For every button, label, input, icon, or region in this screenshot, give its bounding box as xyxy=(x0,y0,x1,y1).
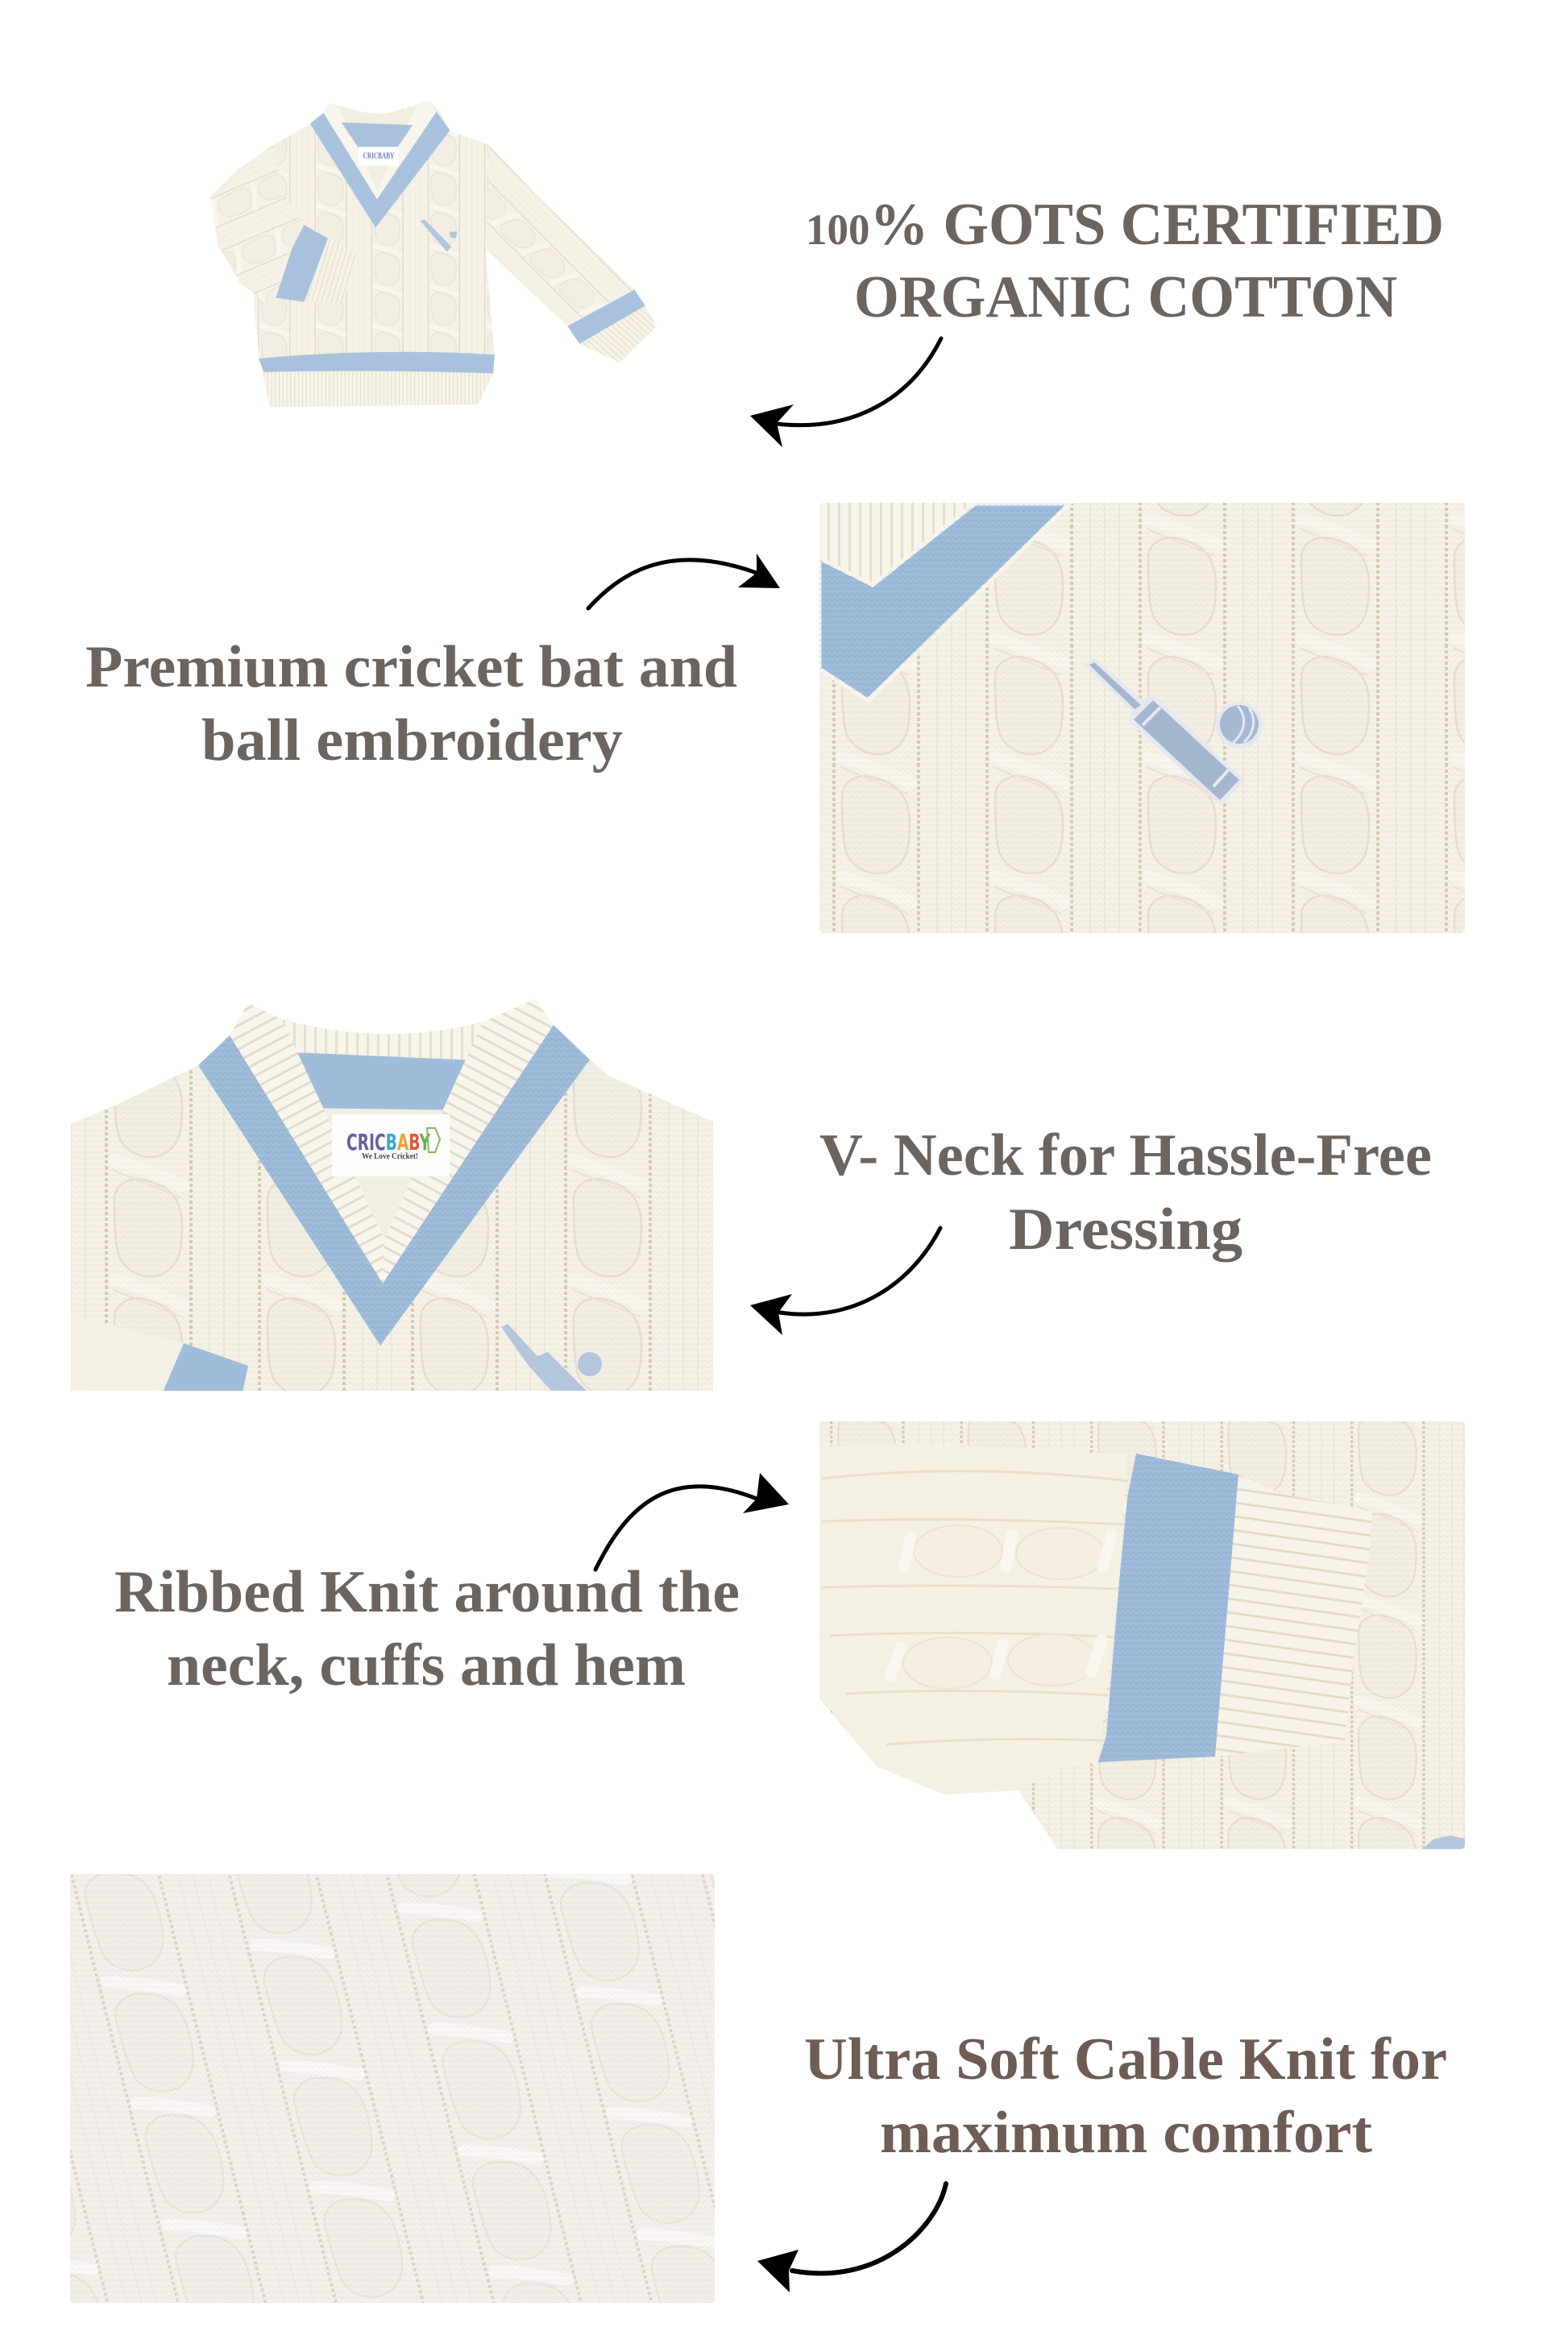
icon: embroidered cricket bat xyxy=(1085,657,1244,806)
blue back-neck tape xyxy=(297,1052,466,1110)
arrow: V-neck xyxy=(750,1228,940,1335)
heading: organic cotton xyxy=(806,192,1444,330)
inner neck xyxy=(324,1054,442,1225)
text: embroidery feature: ball embroidery xyxy=(201,707,623,774)
text: ribbed knit feature: Ribbed Knit around the xyxy=(114,1559,740,1625)
sweater left cuff xyxy=(276,225,359,305)
text: embroidery feature xyxy=(85,634,737,774)
ribbed cuff xyxy=(1215,1475,1372,1757)
icon: green footprint xyxy=(427,1128,440,1152)
back neck ribbing xyxy=(283,1020,482,1060)
cable crossing bars xyxy=(890,1535,1112,1676)
panel: ribbed cuff close-up xyxy=(814,1421,1465,1853)
brand label xyxy=(332,1114,450,1176)
sweater collar xyxy=(310,101,450,228)
sweater neck label: CRICBABY xyxy=(363,152,395,160)
text: V-neck feature: V- Neck for Hassle-Free xyxy=(819,1122,1432,1188)
sleeve cable twists xyxy=(903,1525,1105,1689)
text: ribbed knit feature xyxy=(114,1559,740,1699)
panel: cable knit fabric close-up xyxy=(70,1874,715,2303)
blue collar band xyxy=(819,504,1069,700)
blue cuff band xyxy=(1098,1454,1238,1762)
corner embroidery remnant xyxy=(1422,1836,1465,1849)
collar ribbing corner xyxy=(819,503,972,582)
sweater right sleeve xyxy=(479,145,645,344)
heading: organic cotton: 100% GOTS CERTIFIED xyxy=(806,192,1444,258)
panel: V-neck close-up xyxy=(70,999,715,1392)
sleeve xyxy=(817,1443,1128,1794)
white background below sleeve xyxy=(814,1692,1060,1853)
arrow: ribbed knit xyxy=(595,1473,789,1570)
brand label: We Love Cricket! xyxy=(362,1152,418,1161)
text: ribbed knit feature: neck, cuffs and hem xyxy=(167,1632,686,1699)
icon: cricket ball xyxy=(578,1352,602,1376)
sweater hem xyxy=(259,352,495,407)
arrow: embroidery xyxy=(588,554,780,608)
panel: embroidery close-up xyxy=(819,503,1465,933)
text: cable knit feature: maximum comfort xyxy=(880,2100,1372,2166)
text: embroidery feature: Premium cricket bat and xyxy=(85,634,737,700)
icon: cricket bat xyxy=(501,1324,588,1392)
text: cable knit feature: Ultra Soft Cable Knit for xyxy=(804,2026,1447,2093)
sweater body xyxy=(254,101,495,407)
text: V-neck feature: Dressing xyxy=(1009,1197,1242,1263)
heading: organic cotton: ORGANIC COTTON xyxy=(854,264,1397,330)
text: V-neck feature xyxy=(819,1122,1432,1263)
panel: full sweater product photo xyxy=(210,101,657,407)
sweater embroidery xyxy=(421,219,458,252)
arrow: cable knit xyxy=(757,2184,946,2292)
text: cable knit feature xyxy=(804,2026,1447,2166)
blue collar band xyxy=(198,1025,590,1346)
sweater left sleeve xyxy=(210,145,304,302)
sweater right cuff xyxy=(567,290,657,363)
sleeve creases xyxy=(822,1471,1128,1744)
brand label: CRICBABY xyxy=(346,1129,430,1155)
sleeve and cuff xyxy=(70,1315,250,1392)
icon: embroidered cricket ball xyxy=(1216,702,1263,749)
white ribbed collar xyxy=(230,999,554,1284)
sweater neck label xyxy=(359,147,399,165)
arrow: organic cotton to sweater xyxy=(750,338,941,447)
